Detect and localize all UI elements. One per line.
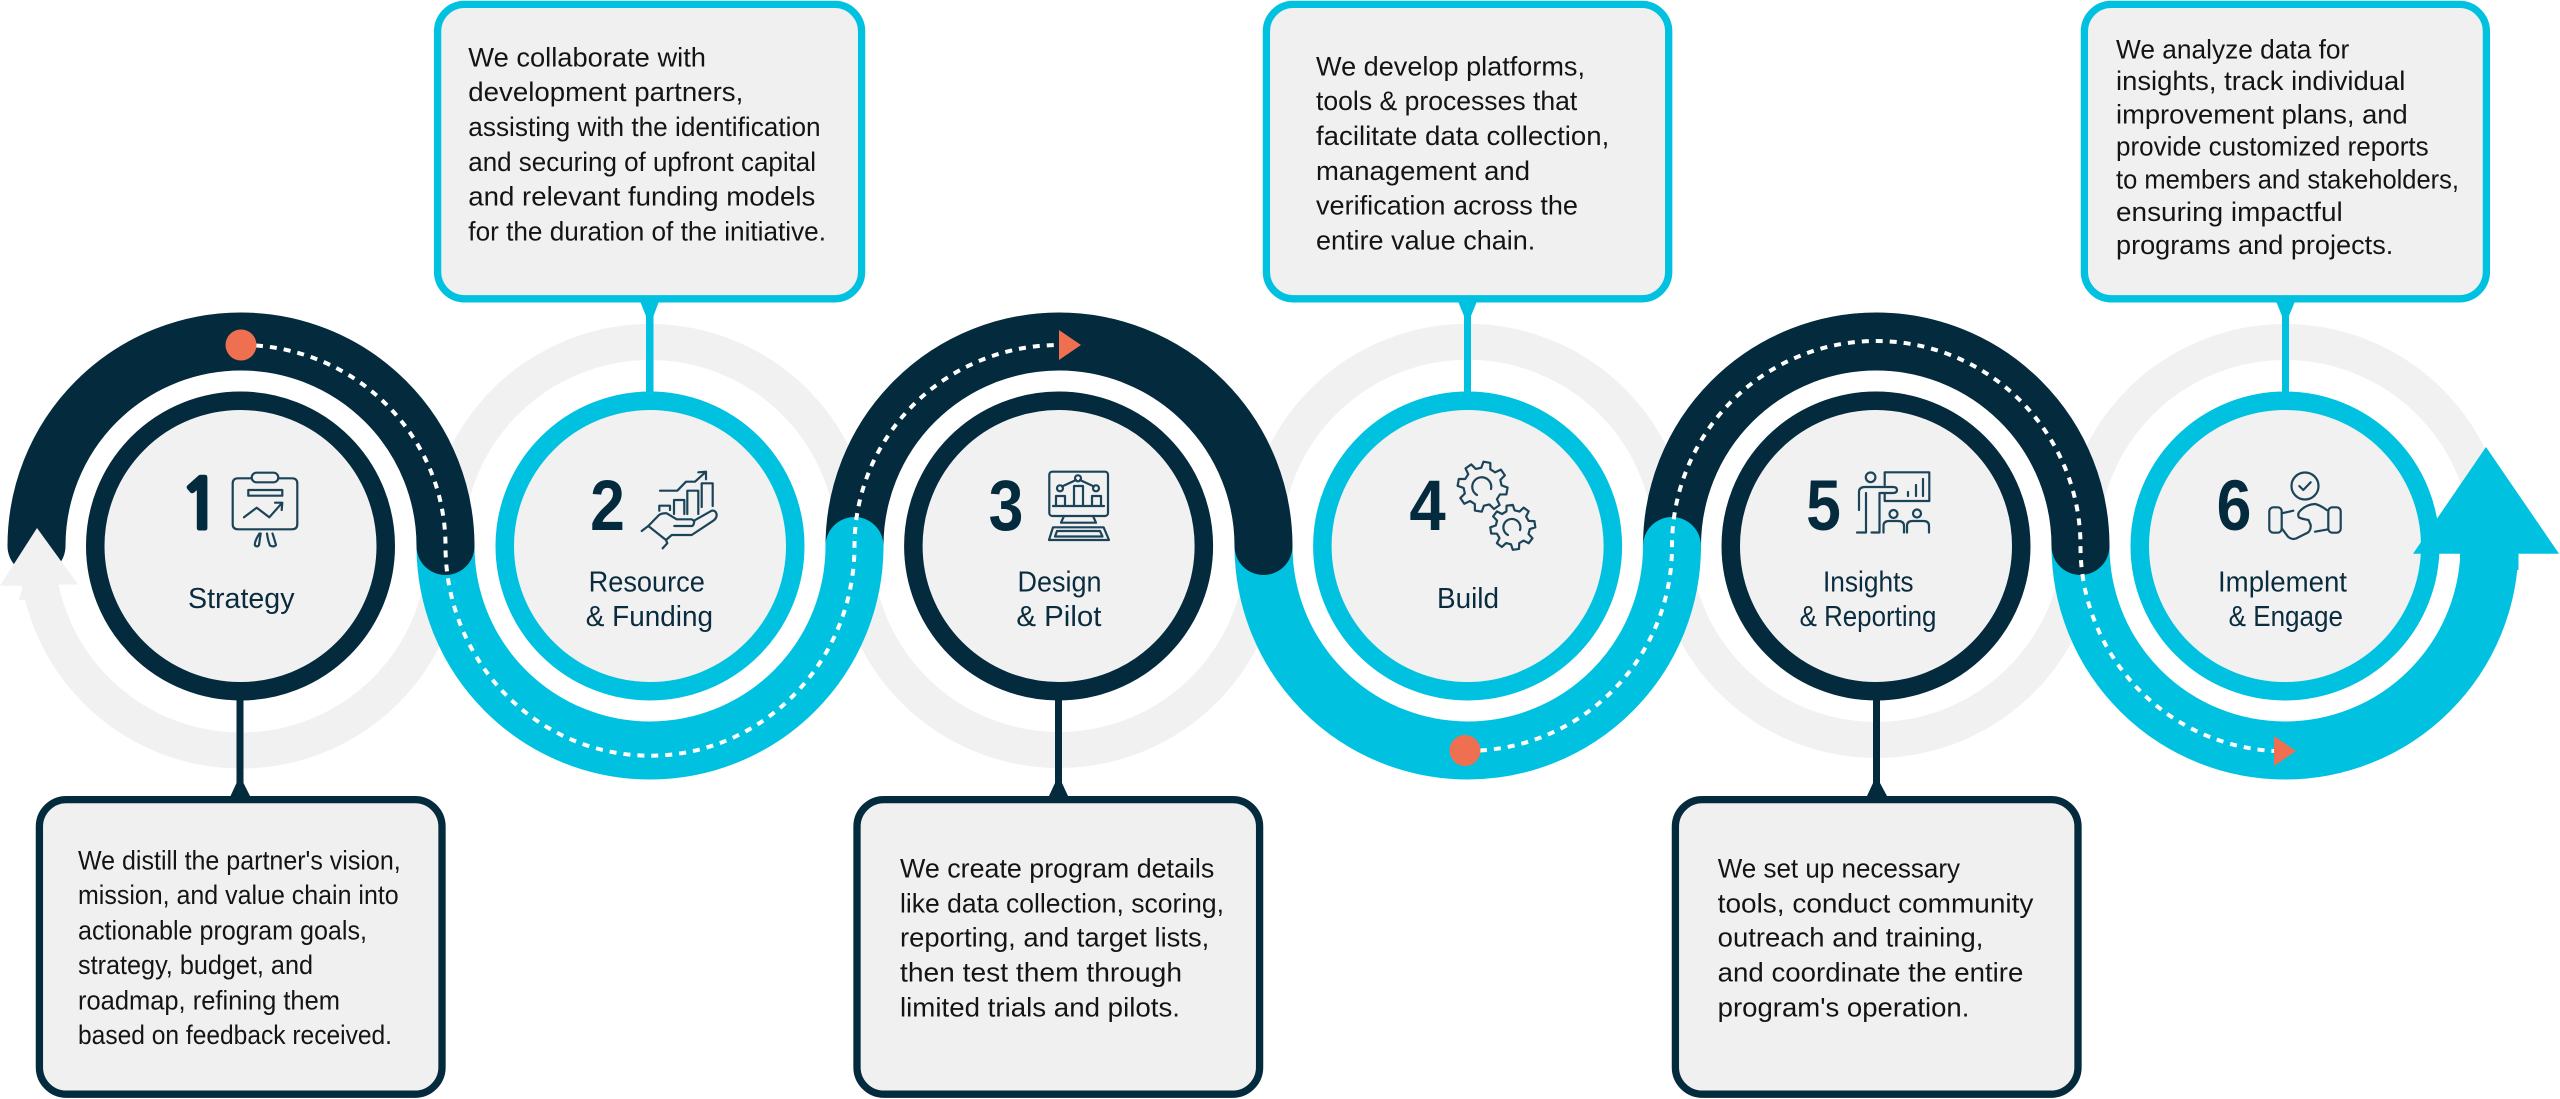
note: step 6: provide customized reports [2116,132,2429,162]
note: step 3: like data collection, scoring, [900,888,1224,918]
grey background wave [36,342,2490,751]
step 1: Strategy: Strategy [188,583,295,615]
step 5: Insights & Reporting: 5 [1806,466,1841,546]
icon: hand with growth chart [642,472,717,548]
note: step 6: We analyze data for [2116,34,2349,64]
note: step 5: and coordinate the entire [1718,958,2023,988]
step 2: Resource & Funding [505,401,795,691]
note: step 6 [2084,4,2486,299]
note: step 4: We develop platforms, [1316,51,1585,81]
note: step 6: programs and projects. [2116,230,2393,260]
step 6: Implement & Engage: 6 [2217,466,2251,546]
step 3: Design & Pilot: 3 [989,466,1023,546]
step 6: Implement & Engage [2140,401,2430,691]
step 6: Implement & Engage: & Engage [2229,601,2343,633]
step 3: Design & Pilot: Design [1018,567,1102,599]
step 2: Resource & Funding: Resource [589,567,705,599]
note: step 4: management and [1316,156,1530,186]
note: step 4: tools & processes that [1316,86,1578,116]
note: step 5 [1675,800,2078,1094]
note: step 5: tools, conduct community [1718,888,2034,918]
note: step 5: We set up necessary [1718,853,1961,883]
note: step 1: strategy, budget, and [78,950,313,980]
step 5: Insights & Reporting: Insights [1823,567,1914,599]
note: step 6: insights, track individual [2116,66,2405,96]
note: step 1: mission, and value chain into [78,880,399,910]
note: step 2: and securing of upfront capital [468,147,816,177]
note: step 4: entire value chain. [1316,225,1535,255]
note: step 5: outreach and training, [1718,923,1983,953]
step 6: Implement & Engage: Implement [2218,567,2347,599]
dashed route: steps 4 to 6 [1450,341,2296,766]
note: step 2: and relevant funding models [468,182,815,212]
note: step 1: We distill the partner's vision, [78,845,401,875]
note: step 3: limited trials and pilots. [900,993,1180,1023]
note: step 5: program's operation. [1718,993,1969,1023]
note: step 2: for the duration of the initiative. [468,217,826,247]
note: step 3: then test them through [900,958,1182,988]
step 5: Insights & Reporting: & Reporting [1800,601,1936,633]
icon: gears [1454,458,1538,552]
step 3: Design & Pilot [913,401,1204,691]
icon: presenter and audience [1857,472,1929,532]
note: step 1: actionable program goals, [78,915,367,945]
arrowhead: teal end [2413,447,2559,570]
note: step 2: assisting with the identification [468,112,821,142]
step 2: Resource & Funding: 2 [590,466,625,546]
note: step 4: facilitate data collection, [1316,121,1609,151]
step 2: Resource & Funding: & Funding [586,601,713,633]
connector: step 1 to note [230,700,250,796]
icon: presentation board [233,473,297,546]
note: step 2: We collaborate with [468,43,706,73]
step 1: Strategy: 1 [179,472,222,540]
note: step 3: reporting, and target lists, [900,923,1209,953]
note: step 3: We create program details [900,853,1214,883]
step 1: Strategy [95,401,386,691]
note: step 2: development partners, [468,77,743,107]
coloured wave band [36,342,2490,751]
icon: monitor with chart [1049,472,1109,540]
step 3: Design & Pilot: & Pilot [1016,601,1101,633]
step 4: Build [1322,401,1613,691]
note: step 4 [1266,4,1669,299]
note: step 1: based on feedback received. [78,1020,392,1050]
connector: step 3 to note [1049,700,1068,796]
connector: step 2 to note [640,300,660,392]
step 4: Build: Build [1437,583,1499,615]
dashed route: steps 1 to 3 [226,330,1081,756]
note: step 6: improvement plans, and [2116,99,2408,129]
note: step 4: verification across the [1316,191,1578,221]
step 5: Insights & Reporting [1731,401,2021,691]
arrowhead: grey start [0,528,78,600]
connector: step 6 to note [2276,300,2296,392]
note: step 2 [438,4,862,299]
connector: step 5 to note [1867,700,1887,796]
note: step 1: roadmap, refining them [78,985,340,1015]
icon: handshake with check [2269,472,2341,539]
step 4: Build: 4 [1409,467,1446,546]
note: step 3 [857,800,1260,1094]
connector: step 4 to note [1458,300,1478,392]
note: step 1 [39,800,442,1094]
note: step 6: to members and stakeholders, [2116,165,2459,195]
note: step 6: ensuring impactful [2116,197,2343,227]
